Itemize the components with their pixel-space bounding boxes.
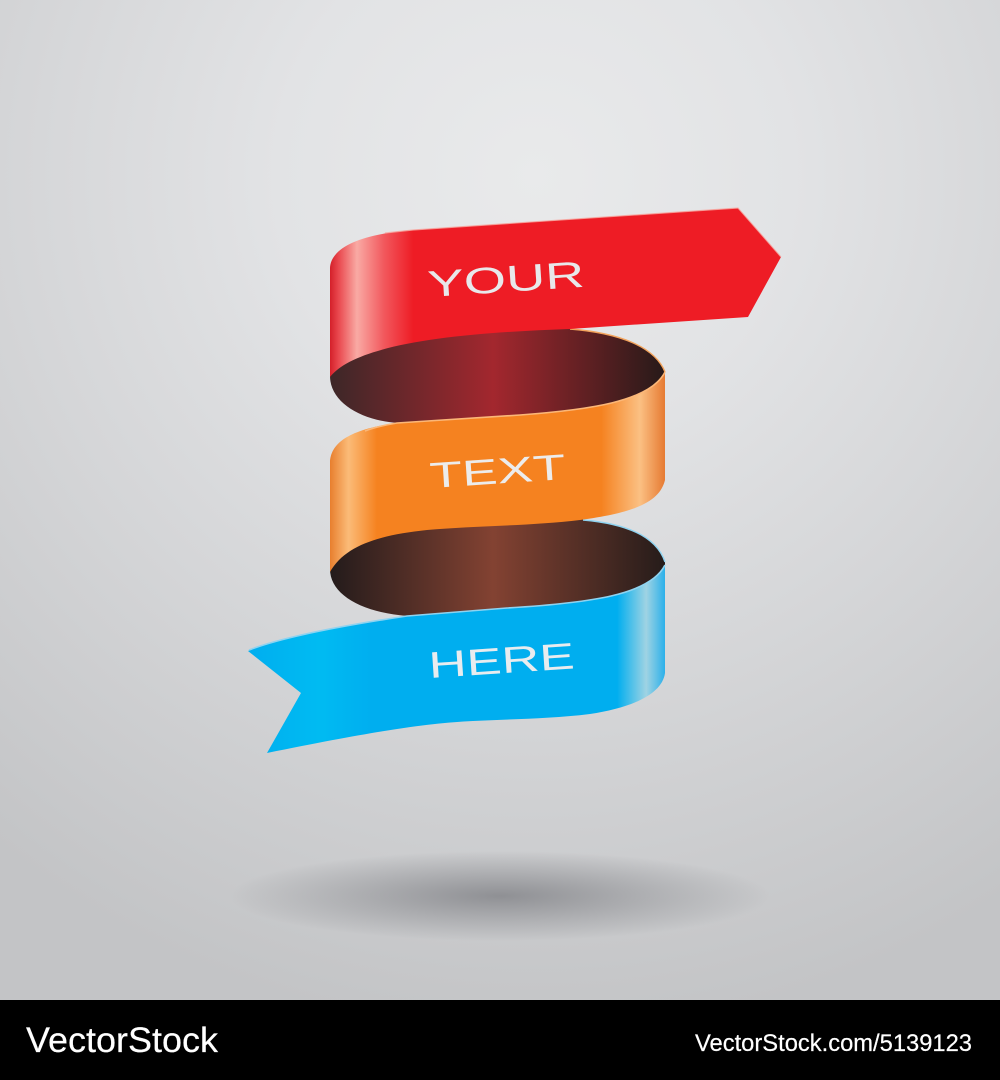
label: text: TEXT [428, 446, 567, 496]
floor shadow [230, 851, 770, 941]
dark inner band: upper [330, 324, 665, 425]
footer logo: VectorStock [26, 1021, 219, 1060]
footer bar [0, 1000, 1000, 1080]
label: your: YOUR [426, 254, 586, 305]
dark inner band: lower [330, 514, 665, 618]
blue ribbon [248, 565, 665, 753]
label: here: HERE [427, 635, 576, 686]
orange ribbon [330, 372, 665, 572]
footer url: VectorStock.com/5139123 [695, 1030, 972, 1057]
red ribbon [330, 208, 781, 377]
